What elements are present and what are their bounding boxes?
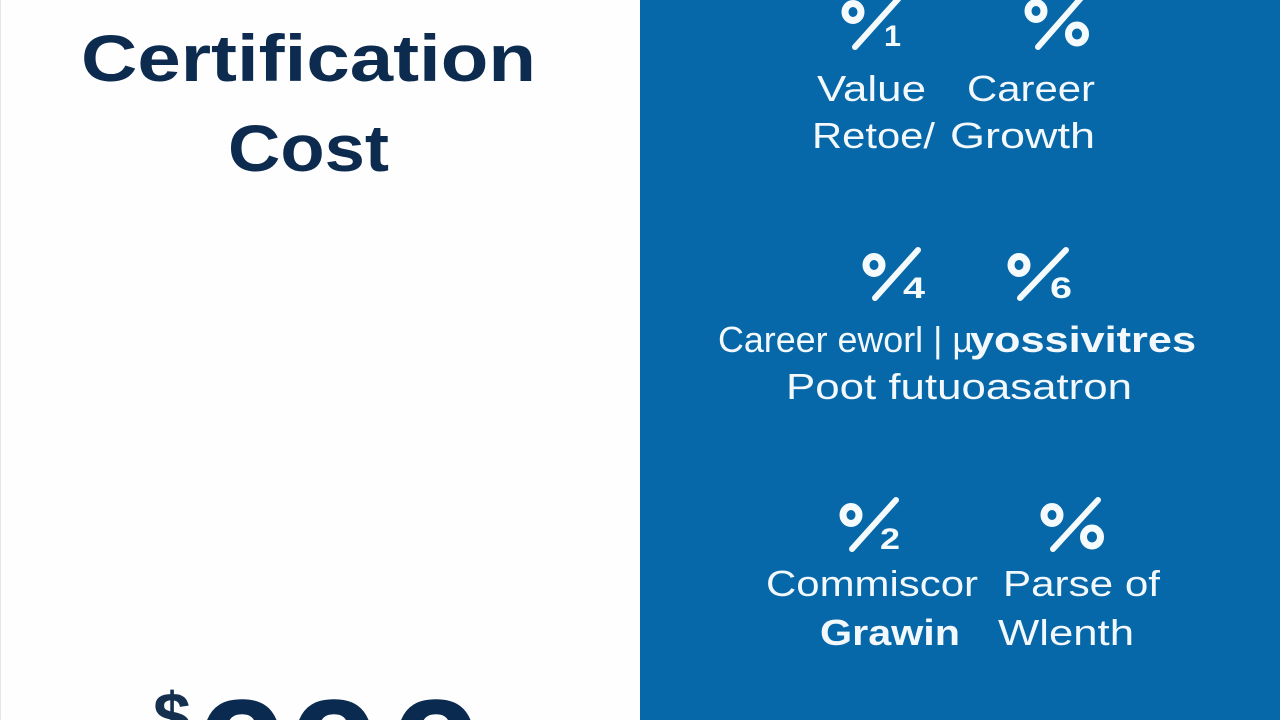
heading: certification cost: Certification: [81, 21, 536, 95]
item: career growth: [950, 0, 1095, 156]
label: career possibilities: yossivitres: [970, 319, 1196, 360]
heading: certification cost: Cost: [228, 111, 389, 185]
label: commiscor growth: [766, 563, 978, 653]
heading: certification cost: [81, 21, 536, 185]
item: percent 4 and 6 icons: [866, 250, 1072, 305]
label: career possibilities: Career eworl | µ: [718, 319, 973, 360]
label: career growth: Career: [967, 68, 1095, 109]
icon: percent 2: [843, 500, 900, 556]
icon: percent 1: 1: [884, 20, 901, 53]
label: parse of wlenth: Wlenth: [998, 612, 1134, 653]
icon: percent 4: 4: [903, 272, 925, 305]
item: value retoe: [812, 0, 935, 156]
icon: percent 0: [1044, 500, 1100, 549]
label: career possibilities: [718, 319, 1196, 407]
icon: percent 6: [1011, 250, 1072, 305]
label: career growth: Growth: [950, 115, 1095, 156]
item: commiscor growth: [766, 500, 978, 653]
cost figure cropped at bottom edge: [153, 670, 482, 720]
label: career possibilities: Poot futuoasatron: [786, 366, 1132, 407]
label: parse of wlenth: [998, 563, 1161, 653]
icon: percent 2: 2: [880, 523, 900, 556]
item: parse of wlenth: [998, 500, 1161, 653]
label: value retoe: Retoe/: [812, 115, 935, 156]
label: parse of wlenth: Parse of: [1003, 563, 1161, 604]
label: career growth: [950, 68, 1095, 156]
label: value retoe: Value: [817, 68, 926, 109]
icon: percent 1: [845, 0, 901, 53]
icon: percent 6: 6: [1050, 272, 1072, 305]
icon: percent 4: [866, 250, 925, 305]
panel: benefits: [640, 0, 1280, 720]
label: value retoe: [812, 68, 935, 156]
label: commiscor growth: Grawin: [820, 612, 960, 653]
icon: percent 0: [1028, 0, 1086, 47]
label: commiscor growth: Commiscor: [766, 563, 978, 604]
panel: certification cost: [0, 0, 640, 720]
